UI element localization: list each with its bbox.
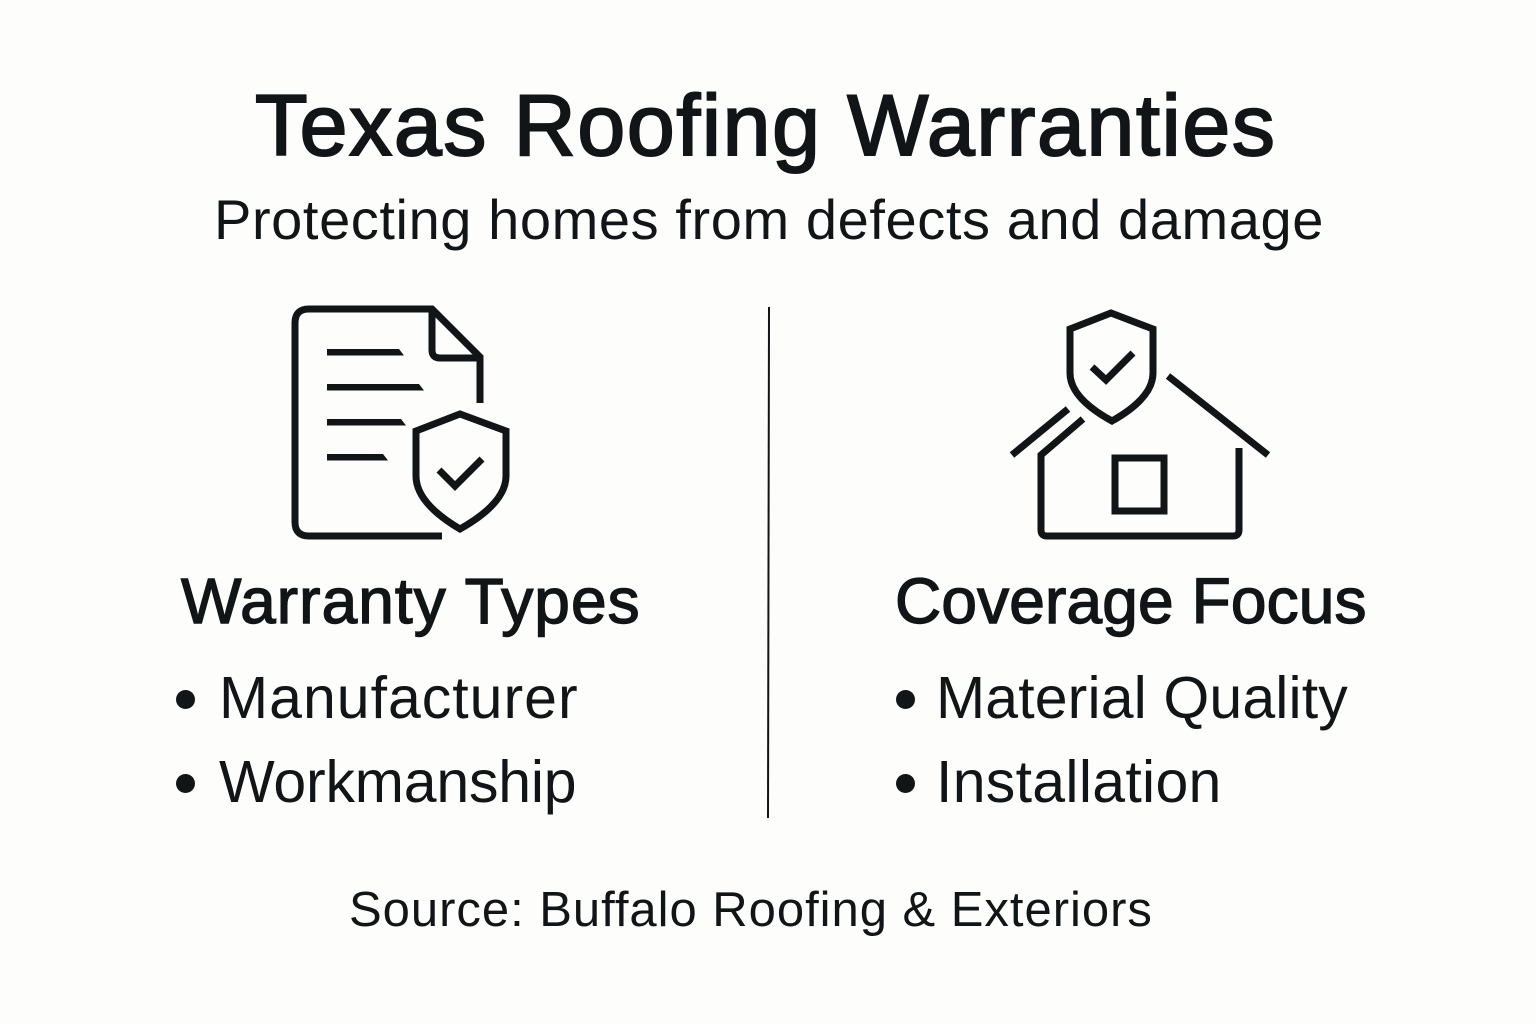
divider — [767, 307, 770, 818]
list: warranty types — [176, 665, 579, 815]
walls — [1041, 419, 1239, 536]
bullet: workmanship: Workmanship — [219, 749, 576, 815]
source note: Source: Buffalo Roofing & Exteriors — [349, 883, 1153, 937]
shield — [416, 414, 506, 529]
icon: warranty document with shield — [292, 306, 510, 540]
icon: house with shield — [1010, 309, 1270, 540]
window — [1115, 458, 1164, 511]
check mark — [439, 459, 482, 486]
title: Texas Roofing Warranties — [255, 78, 1277, 174]
bullet: installation: Installation — [936, 749, 1222, 815]
shield — [1070, 313, 1153, 421]
text lines — [327, 349, 424, 460]
subtitle: Protecting homes from defects and damage — [214, 188, 1324, 251]
check mark — [1092, 353, 1133, 380]
list: coverage focus — [896, 665, 1348, 815]
bullet: manufacturer: Manufacturer — [219, 665, 579, 731]
document outline — [295, 309, 480, 536]
heading: coverage focus: Coverage Focus — [895, 565, 1367, 637]
folded corner — [432, 309, 480, 358]
bullet: material quality: Material Quality — [936, 665, 1348, 731]
heading: warranty types: Warranty Types — [181, 565, 641, 637]
roof — [1012, 376, 1268, 455]
